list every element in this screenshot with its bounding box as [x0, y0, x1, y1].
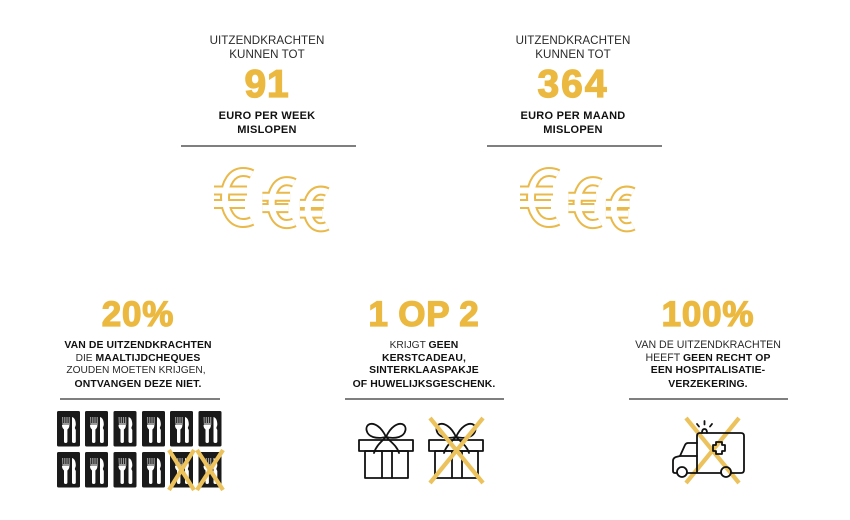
- text: hospitalisatie description: VERZEKERING.: [668, 379, 748, 390]
- text: geschenk description: SINTERKLAASPAKJE: [369, 365, 479, 376]
- icon: crossed-out gift: [429, 418, 483, 483]
- text: geschenk description: KERSTCADEAU,: [382, 353, 466, 364]
- text: uitzendkrachten kunnen tot: KUNNEN TOT: [229, 48, 305, 61]
- icon: three euro signs: [214, 172, 327, 227]
- text: euro per maand mislopen: EURO PER MAAND: [521, 110, 625, 122]
- text: uitzendkrachten kunnen tot: UITZENDKRACHTEN: [516, 34, 630, 47]
- panel: 100% hospitalisatieverzekering: [629, 295, 788, 483]
- icon: crossed-out ambulance: [673, 418, 744, 483]
- panel: 1 op 2 geschenk: [345, 295, 504, 483]
- text: euro per week mislopen: EURO PER WEEK: [219, 110, 315, 122]
- icon grid: meal tickets: [57, 411, 223, 490]
- text: euro per maand mislopen: MISLOPEN: [543, 124, 603, 136]
- text: hospitalisatie description: HEEFT GEEN RECHT OP: [645, 352, 771, 364]
- text: maaltijdcheques description: ONTVANGEN DEZE NIET.: [75, 379, 201, 390]
- panel: 91 euro per week: [181, 34, 356, 227]
- text: uitzendkrachten kunnen tot: UITZENDKRACHTEN: [210, 34, 324, 47]
- number: 91: 91: [245, 63, 289, 106]
- text: maaltijdcheques description: ZOUDEN MOETEN KRIJGEN,: [66, 365, 206, 376]
- number: 364: 364: [537, 63, 609, 106]
- number: 100%: 100%: [662, 295, 754, 334]
- panel: 364 euro per maand: [487, 34, 662, 227]
- text: maaltijdcheques description: VAN DE UITZENDKRACHTEN: [64, 340, 212, 351]
- text: hospitalisatie description: EEN HOSPITALISATIE-: [651, 365, 766, 376]
- text: hospitalisatie description: VAN DE UITZENDKRACHTEN: [635, 339, 781, 351]
- text: maaltijdcheques description: DIE MAALTIJDCHEQUES: [76, 353, 200, 364]
- panel: 20% maaltijdcheques: [57, 295, 223, 490]
- text: uitzendkrachten kunnen tot: KUNNEN TOT: [535, 48, 611, 61]
- icon: three euro signs: [520, 172, 633, 227]
- text: geschenk description: KRIJGT GEEN: [390, 340, 458, 351]
- icon: gift: [359, 424, 413, 478]
- number: 20%: 20%: [102, 295, 174, 334]
- text: euro per week mislopen: MISLOPEN: [237, 124, 297, 136]
- text: geschenk description: OF HUWELIJKSGESCHENK.: [353, 379, 495, 390]
- number: 1 op 2: 1 OP 2: [368, 295, 480, 334]
